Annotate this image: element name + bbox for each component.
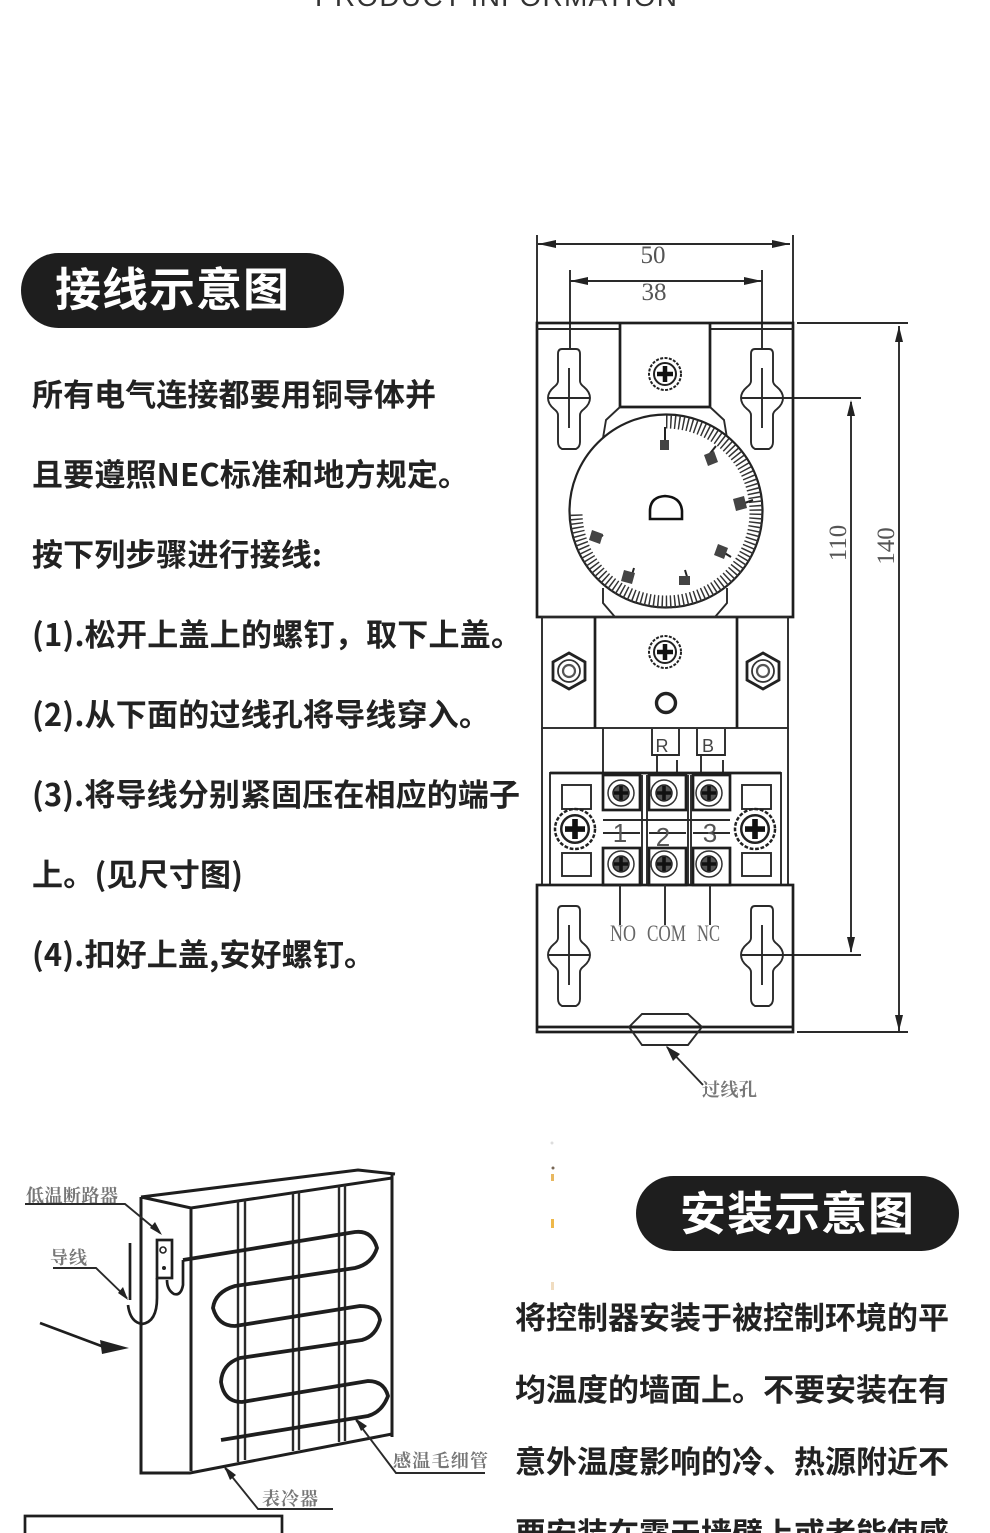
lower plate bbox=[537, 885, 793, 1045]
cropped note box bbox=[25, 1516, 282, 1533]
dimension: width 50 bbox=[537, 235, 793, 323]
terminal block: 2 bbox=[656, 822, 670, 852]
temperature dial bbox=[570, 414, 762, 608]
thermostat dimension drawing bbox=[537, 235, 908, 1100]
terminal block: 1 bbox=[613, 818, 627, 848]
R and B lugs: R bbox=[656, 736, 668, 756]
dimension: hole height 110: 110 bbox=[825, 525, 852, 561]
text block: wiring instructions: (2).从下面的过线孔将导线穿入。 bbox=[32, 690, 490, 735]
stray dots bbox=[550, 1142, 554, 1290]
text block: wiring instructions: (4).扣好上盖,安好螺钉。 bbox=[32, 930, 375, 975]
dimension: height 140 bbox=[797, 323, 908, 1032]
R and B lugs bbox=[542, 728, 788, 885]
text block: wiring instructions: 所有电气连接都要用铜导体并 bbox=[32, 370, 436, 415]
dimension: hole height 110 bbox=[780, 398, 861, 955]
label: air cooler: 表冷器 bbox=[262, 1488, 318, 1509]
R and B lugs: B bbox=[702, 736, 714, 756]
text block: installation instructions: 将控制器安装于被控制环境的平 bbox=[515, 1293, 949, 1338]
label: wire hole: 过线孔 bbox=[702, 1080, 757, 1100]
label: wire: 导线 bbox=[50, 1248, 87, 1268]
dimension: hole spacing 38 bbox=[570, 270, 762, 349]
terminal block: 3 bbox=[703, 818, 717, 848]
text block: installation instructions: 均温度的墙面上。不要安装在有 bbox=[515, 1365, 949, 1410]
heading pill: wiring diagram: 接线示意图 bbox=[55, 254, 289, 320]
lower plate: COM bbox=[647, 921, 686, 946]
installation diagram bbox=[25, 1170, 488, 1533]
text block: wiring instructions: 按下列步骤进行接线: bbox=[32, 530, 322, 575]
capillary serpentine bbox=[183, 1232, 388, 1440]
text block: wiring instructions: 上。(见尺寸图) bbox=[32, 850, 243, 895]
dimension: height 140: 140 bbox=[873, 527, 900, 565]
text block: wiring instructions bbox=[32, 370, 522, 975]
heading pill: installation diagram: 安装示意图 bbox=[680, 1178, 914, 1244]
label: air cooler bbox=[224, 1466, 333, 1509]
air cooler body bbox=[141, 1170, 395, 1473]
lower plate: NC bbox=[697, 921, 720, 946]
text block: installation instructions: 意外温度影响的冷、热源附近不 bbox=[515, 1437, 949, 1482]
text block: wiring instructions: (3).将导线分别紧固压在相应的端子 bbox=[32, 770, 520, 815]
label: capillary bbox=[355, 1418, 488, 1473]
label: wire bbox=[50, 1248, 128, 1300]
terminal block bbox=[550, 773, 781, 885]
text block: wiring instructions: (1).松开上盖上的螺钉，取下上盖。 bbox=[32, 610, 522, 655]
label: wire hole bbox=[666, 1046, 757, 1100]
label: capillary: 感温毛细管 bbox=[393, 1450, 488, 1471]
label: low temperature cutout bbox=[25, 1185, 162, 1235]
dimension: hole spacing 38: 38 bbox=[642, 279, 666, 306]
label: low temperature cutout: 低温断路器 bbox=[26, 1185, 118, 1206]
text block: wiring instructions: 且要遵照NEC标准和地方规定。 bbox=[32, 450, 469, 495]
lower plate: NO bbox=[610, 921, 636, 946]
middle plate with nuts bbox=[542, 617, 788, 728]
heading pill: installation diagram bbox=[636, 1176, 959, 1251]
heading pill: wiring diagram bbox=[21, 253, 344, 328]
upper plate bbox=[537, 323, 793, 617]
text block: installation instructions bbox=[515, 1293, 949, 1533]
low temperature cutout and wiring bbox=[128, 1240, 183, 1324]
dimension: width 50: 50 bbox=[640, 242, 666, 269]
air flow arrow bbox=[40, 1323, 129, 1354]
